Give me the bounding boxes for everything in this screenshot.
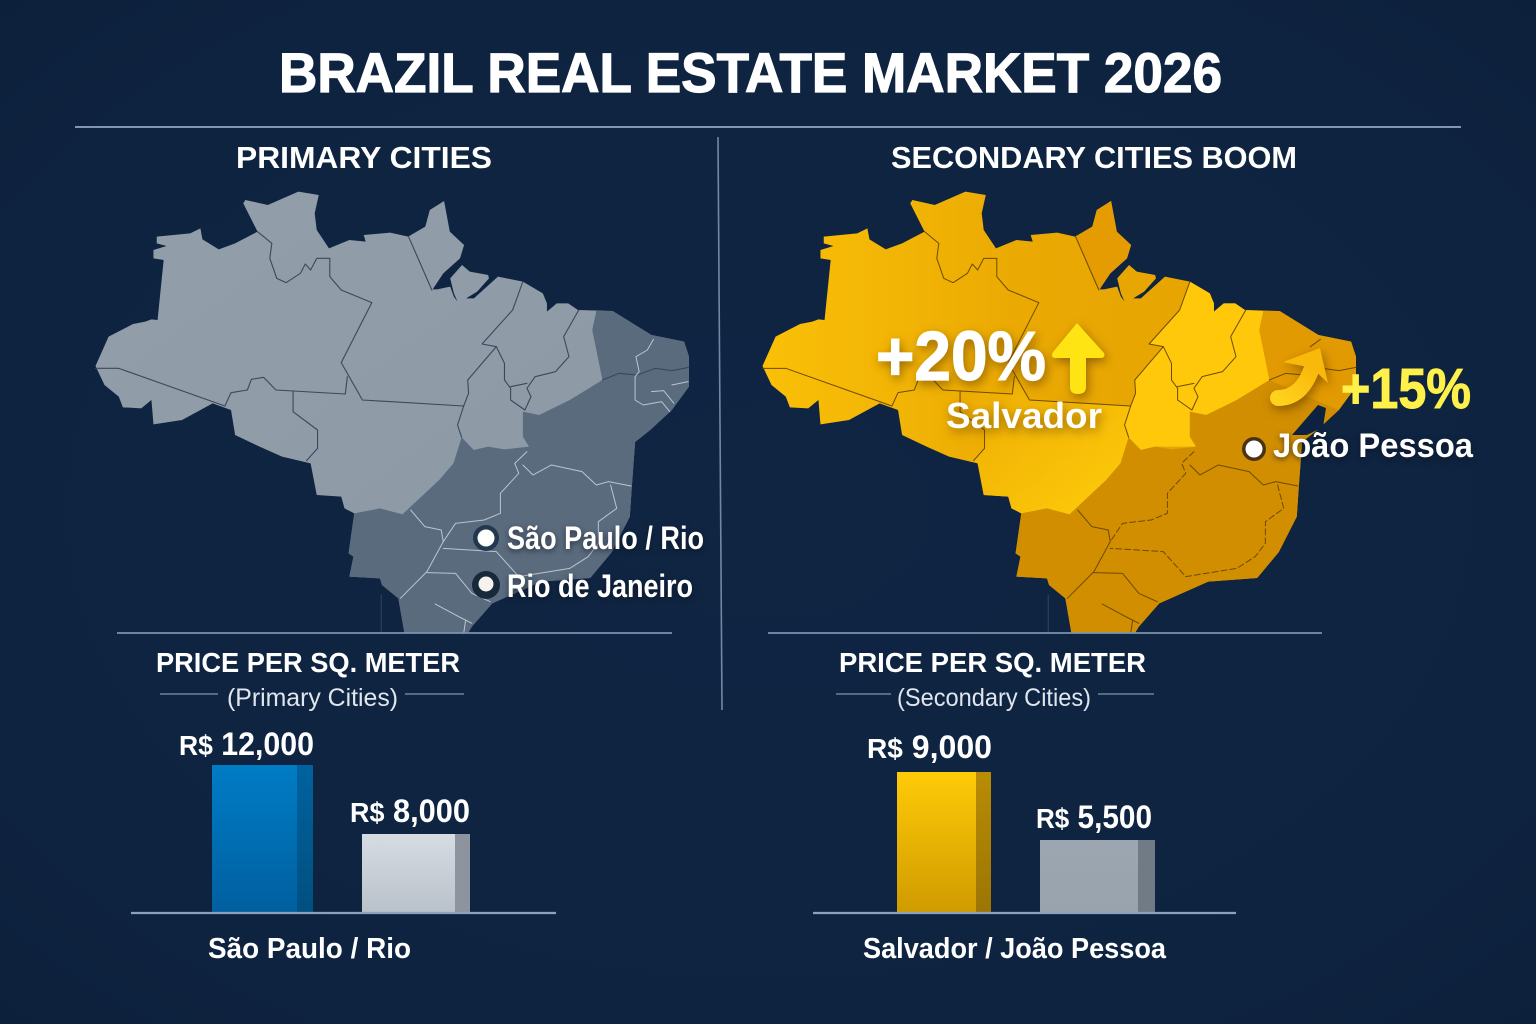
bar: R$ 9,000 <box>867 729 992 913</box>
map region: central west bright gold <box>960 377 1131 514</box>
chart heading: PRICE PER SQ. METER <box>156 647 460 678</box>
map region: northeast interior bright yellow <box>1125 282 1269 450</box>
map region: south and southeast amber <box>1016 380 1339 633</box>
bar: R$ 12,000: R$ 12,000 <box>179 726 314 762</box>
map: primary cities Brazil <box>96 192 689 633</box>
map: secondary cities Brazil <box>763 192 1356 633</box>
map region: north gold <box>763 192 1356 633</box>
axis label: São Paulo / Rio <box>208 933 411 965</box>
axis label: Salvador / João Pessoa <box>863 933 1167 965</box>
chart heading: PRICE PER SQ. METER <box>839 647 1146 678</box>
icon: curved arrow <box>1278 348 1328 398</box>
bar: R$ 12,000 <box>179 726 314 913</box>
map region: northeast coast <box>1259 311 1356 410</box>
panel: secondary price chart <box>813 647 1236 965</box>
coastal inlet shadow <box>1292 405 1326 435</box>
icon: up arrow <box>1052 323 1104 394</box>
city label: Salvador: Salvador <box>946 395 1102 436</box>
heading: primary cities: PRIMARY CITIES <box>236 140 492 175</box>
map region: north and central grey <box>96 192 689 633</box>
bar: R$ 8,000 <box>350 793 470 913</box>
growth value: +15%: +15% <box>1341 357 1471 421</box>
bar: R$ 5,500: R$ 5,500 <box>1036 799 1152 835</box>
chart subheading: (Secondary Cities) <box>897 684 1091 712</box>
pin: João Pessoa <box>1242 437 1266 461</box>
title: BRAZIL REAL ESTATE MARKET 2026 <box>279 41 1222 104</box>
chart subheading: (Primary Cities) <box>227 684 398 712</box>
map pin label: Rio de Janeiro: Rio de Janeiro <box>507 568 693 604</box>
growth value: +20%: +20% <box>876 317 1046 395</box>
map region: Amapá <box>1075 201 1131 290</box>
panel: primary price chart <box>131 647 556 965</box>
callout: +15% João Pessoa <box>1242 348 1474 465</box>
callout: +20% Salvador <box>876 317 1104 436</box>
bar: R$ 9,000: R$ 9,000 <box>867 729 992 765</box>
bar: R$ 5,500 <box>1036 799 1155 913</box>
map pin label: São Paulo / Rio: São Paulo / Rio <box>507 520 704 556</box>
heading: secondary cities boom: SECONDARY CITIES BOOM <box>891 140 1297 175</box>
bar: R$ 8,000: R$ 8,000 <box>350 793 470 829</box>
map region: highlighted southeast and northeast <box>349 311 689 633</box>
city label: João Pessoa: João Pessoa <box>1273 427 1474 465</box>
